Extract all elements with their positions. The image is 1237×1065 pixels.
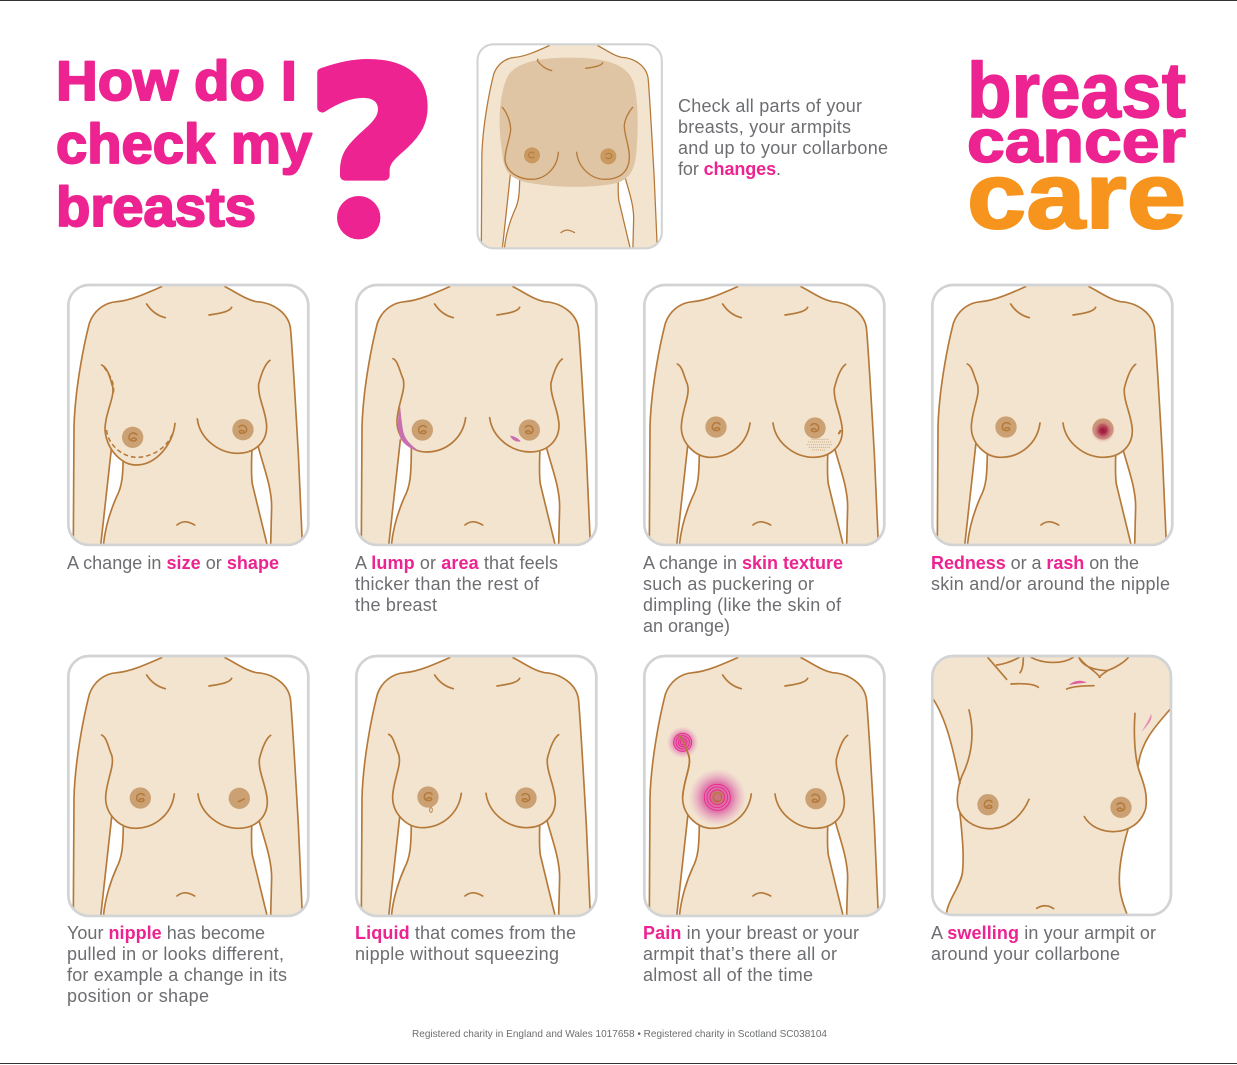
caption: lump xyxy=(355,553,558,615)
bottom page rule xyxy=(0,1063,1237,1064)
panel: liquid xyxy=(356,656,596,918)
caption: lump: the breast xyxy=(355,595,437,615)
logo: breast cancer care: cancer xyxy=(967,108,1186,175)
logo: breast cancer care: breast xyxy=(967,46,1186,134)
logo: breast cancer care: care xyxy=(967,143,1186,248)
intro text: breasts, your armpits xyxy=(678,117,851,137)
panel: skin texture xyxy=(644,285,884,547)
title: breasts xyxy=(56,175,256,238)
caption: skin texture: an orange) xyxy=(643,616,730,636)
large question mark: ? xyxy=(307,23,437,285)
caption: skin texture: A change in skin texture xyxy=(643,553,843,573)
caption: liquid xyxy=(355,923,576,964)
panel: lump xyxy=(356,285,596,547)
panel: redness or rash xyxy=(932,285,1172,547)
caption: size or shape: A change in size or shape xyxy=(67,553,279,573)
panel: where to check xyxy=(478,44,662,250)
intro text: and up to your collarbone xyxy=(678,138,888,158)
caption: lump: A lump or area that feels xyxy=(355,553,558,573)
caption: nipple: Your nipple has become xyxy=(67,923,265,943)
caption: pain: almost all of the time xyxy=(643,965,813,985)
caption: swelling: around your collarbone xyxy=(931,944,1120,964)
caption: redness xyxy=(931,553,1170,594)
large question mark xyxy=(317,59,428,240)
caption: nipple: position or shape xyxy=(67,986,209,1006)
caption: pain: Pain in your breast or your xyxy=(643,923,859,943)
caption: skin texture xyxy=(643,553,843,636)
title xyxy=(56,49,312,238)
panel: change in size or shape xyxy=(68,285,308,547)
caption: pain xyxy=(643,923,859,985)
panel: nipple change xyxy=(68,656,308,918)
caption: redness: Redness or a rash on the xyxy=(931,553,1139,573)
caption: redness: skin and/or around the nipple xyxy=(931,574,1170,594)
caption: skin texture: such as puckering or xyxy=(643,574,814,594)
top page rule xyxy=(0,0,1237,1)
logo: breast cancer care xyxy=(967,46,1186,248)
caption: swelling xyxy=(931,923,1156,964)
title: How do I xyxy=(56,49,297,112)
caption: swelling: A swelling in your armpit or xyxy=(931,923,1156,943)
caption: nipple: pulled in or looks different, xyxy=(67,944,284,964)
caption: liquid: nipple without squeezing xyxy=(355,944,559,964)
intro text: Check all parts of your xyxy=(678,96,862,116)
caption: pain: armpit that’s there all or xyxy=(643,944,837,964)
title: check my xyxy=(56,112,312,175)
caption: liquid: Liquid that comes from the xyxy=(355,923,576,943)
footer charity note: Registered charity in England and Wales 1017658 • Registered charity in Scotland SC038104 xyxy=(412,1028,827,1040)
intro text xyxy=(678,96,888,179)
panel: swelling xyxy=(930,653,1173,915)
intro text: for changes. xyxy=(678,159,781,179)
shaded check area xyxy=(500,58,638,187)
caption: nipple xyxy=(67,923,287,1006)
panel: pain xyxy=(644,656,884,918)
caption: skin texture: dimpling (like the skin of xyxy=(643,595,842,615)
caption: lump: thicker than the rest of xyxy=(355,574,540,594)
caption: nipple: for example a change in its xyxy=(67,965,287,985)
